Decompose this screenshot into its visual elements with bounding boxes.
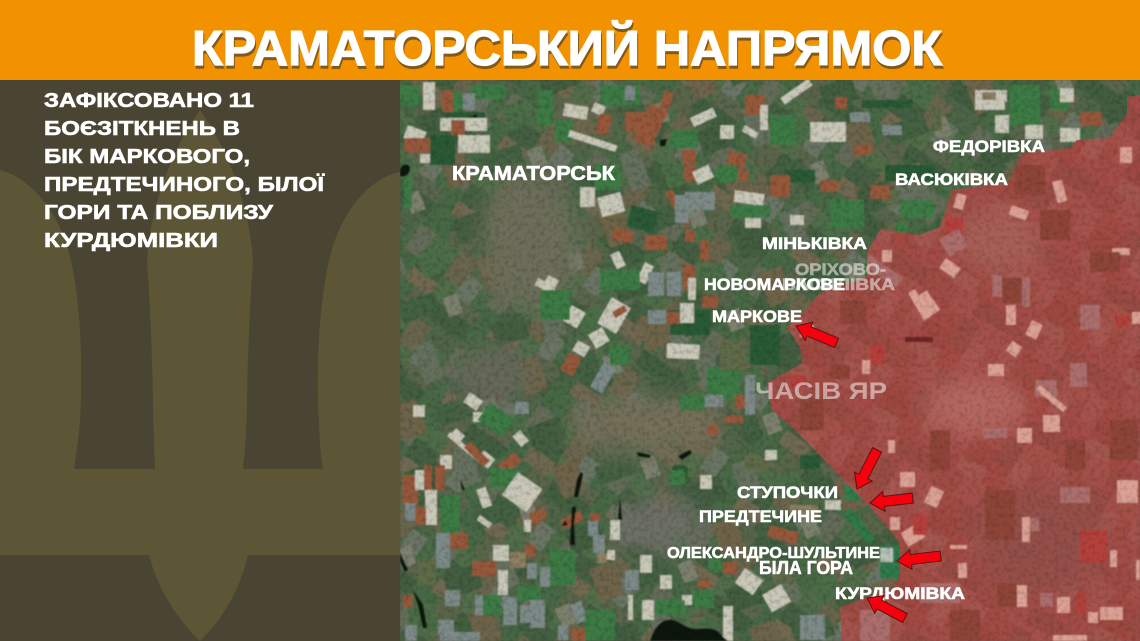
title: КРАМАТОРСЬКИЙ НАПРЯМОК bbox=[192, 21, 942, 76]
text block: engagement summary: ЗАФІКСОВАНО 11 bbox=[44, 90, 254, 112]
icon: trident emblem bbox=[0, 110, 400, 641]
map labels: settlements: ФЕДОРІВКА bbox=[933, 137, 1045, 156]
text block: engagement summary: БІК МАРКОВОГО, bbox=[44, 146, 250, 168]
map labels: settlements: ПРЕДТЕЧИНЕ bbox=[699, 507, 822, 526]
map label: Оріхово-Василівка bbox=[782, 260, 895, 294]
header band bbox=[0, 0, 1140, 80]
arrow: toward Stupochky bbox=[848, 445, 886, 494]
arrow: toward Predtechyne bbox=[869, 488, 914, 513]
map labels: settlements bbox=[452, 137, 1045, 603]
map labels: settlements: СТУПОЧКИ bbox=[737, 483, 838, 502]
text block: engagement summary: КУРДЮМІВКИ bbox=[44, 230, 218, 252]
map labels: settlements: КУРДЮМІВКА bbox=[835, 584, 965, 603]
map label: Оріхово-Василівка: ОРІХОВО- bbox=[795, 260, 886, 279]
map label: Часів Яр: ЧАСІВ ЯР bbox=[755, 378, 887, 405]
map labels: settlements: КРАМАТОРСЬК bbox=[452, 163, 616, 185]
map labels: settlements: ОЛЕКСАНДРО-ШУЛЬТИНЕ bbox=[667, 545, 880, 562]
map label: Оріхово-Василівка: ВАСИЛІВКА bbox=[782, 275, 895, 294]
text block: engagement summary: БОЄЗІТКНЕНЬ В bbox=[44, 118, 240, 140]
arrow: toward Markove bbox=[792, 317, 840, 352]
map labels: settlements: МІНЬКІВКА bbox=[762, 234, 867, 253]
satellite map bbox=[400, 79, 1140, 641]
text block: engagement summary: ПРЕДТЕЧИНОГО, БІЛОЇ bbox=[44, 173, 325, 196]
red occupied zone bbox=[760, 90, 1140, 641]
text block: engagement summary bbox=[44, 90, 325, 252]
left panel bbox=[0, 80, 400, 641]
map labels: settlements: ВАСЮКІВКА bbox=[895, 170, 1008, 189]
text block: engagement summary: ГОРИ ТА ПОБЛИЗУ bbox=[44, 202, 274, 224]
arrow: toward Bila Hora bbox=[896, 546, 942, 571]
map labels: settlements: НОВОМАРКОВЕ bbox=[704, 275, 845, 294]
arrow: toward Kurdiumivka bbox=[862, 589, 910, 627]
map labels: settlements: МАРКОВЕ bbox=[712, 307, 802, 326]
map labels: settlements: БІЛА ГОРА bbox=[759, 558, 853, 578]
